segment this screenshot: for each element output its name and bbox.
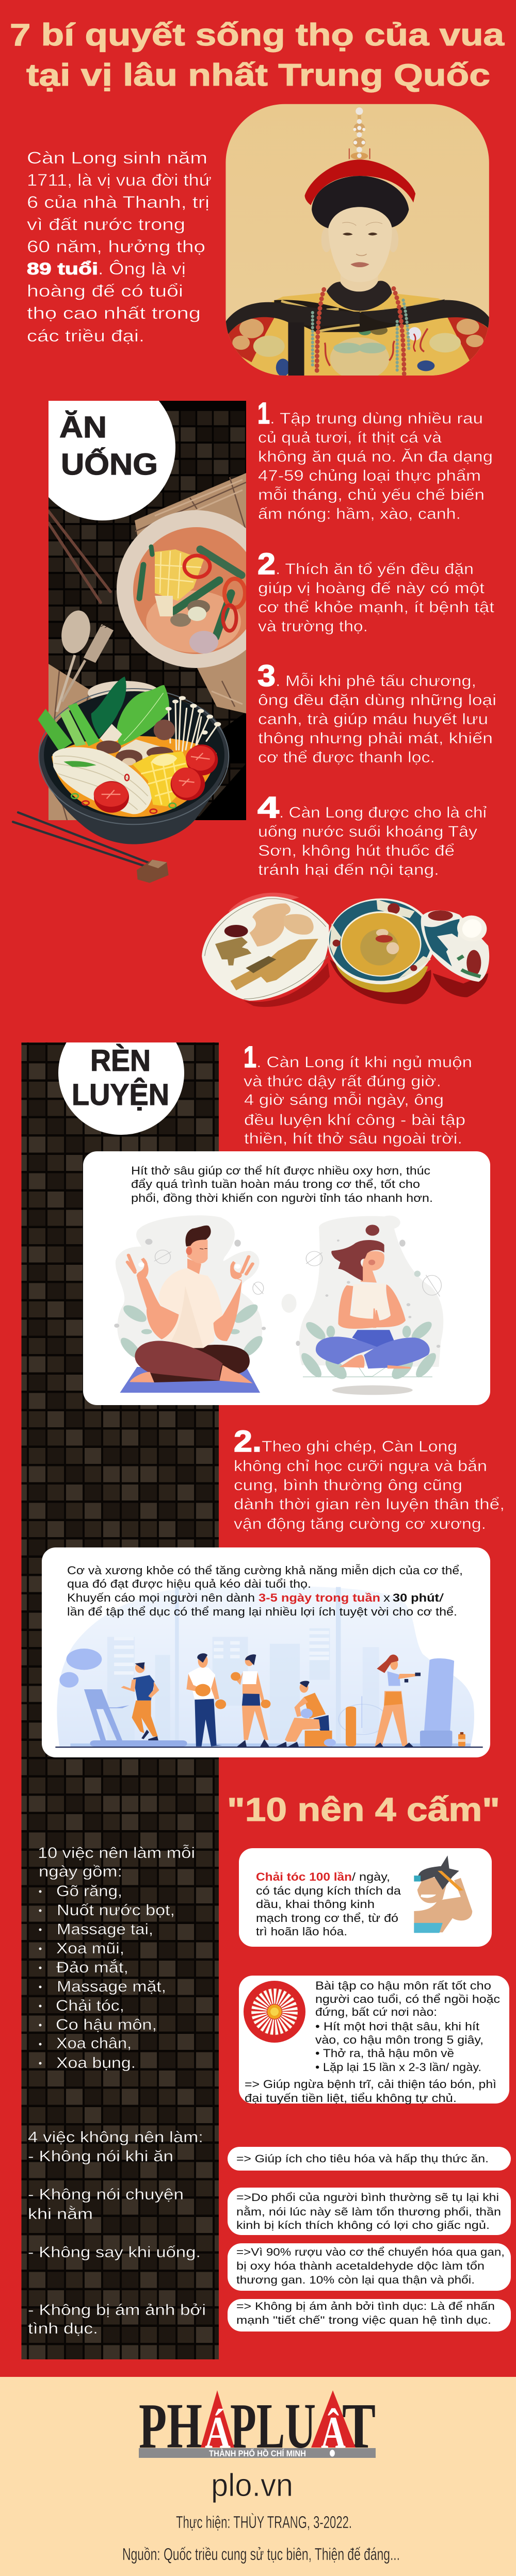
text block: 10 daily habits: Xoa mũi, xyxy=(56,1940,124,1957)
text block: training tip 1: và thức dậy rất đúng giờ. xyxy=(244,1073,441,1090)
robe xyxy=(226,292,489,376)
text block: training tip 1: . Càn Long ít khi ngủ muộn xyxy=(256,1054,472,1071)
text block: hair brushing benefit: trì hoãn lão hóa. xyxy=(256,1925,347,1938)
monstera leaves xyxy=(67,1649,102,1670)
fur collar xyxy=(327,281,392,311)
text block: breathing benefits xyxy=(131,1164,433,1204)
neck xyxy=(341,274,378,292)
title xyxy=(10,18,505,92)
text block: 4 prohibitions: tình dục. xyxy=(28,2320,98,2337)
red sleeves xyxy=(227,313,274,362)
illustration: meditating woman xyxy=(282,1216,443,1395)
text block: hair brushing benefit: dầu, khai thông kinh xyxy=(256,1898,375,1911)
text block: 4 prohibitions: - Không nói chuyện xyxy=(28,2186,184,2203)
bead necklace xyxy=(317,288,404,374)
tip 4: Sơn, không hút thuốc để xyxy=(258,842,455,859)
text block: exercise recommendation: Cơ và xương khỏe có thể tăng cường khả năng miễn dịch của cơ thể, xyxy=(67,1564,463,1577)
text block: 10 daily habits: Đảo mắt, xyxy=(56,1959,128,1976)
text block: breathing benefits: đẩy quá trình tuần hoàn máu trong cơ thể, tốt cho xyxy=(131,1178,420,1191)
tip 1: 1 xyxy=(257,397,270,430)
text block: training tip 1: 4 giờ sáng mỗi ngày, ông xyxy=(244,1091,444,1108)
boxing woman xyxy=(375,1655,421,1747)
tip 3: canh, trà giúp máu huyết lưu xyxy=(258,711,488,728)
illustration: meditating man xyxy=(114,1215,266,1393)
plate xyxy=(202,896,329,1001)
text block: 4 prohibitions: - Không nói khi ăn xyxy=(28,2148,173,2165)
credits: Thực hiện: THÙY TRANG, 3-2022. xyxy=(176,2513,352,2532)
text block: exercise recommendation: 30 phút xyxy=(393,1591,440,1604)
text block: introduction: 60 năm, hưởng thọ xyxy=(27,237,205,256)
text block: 10 daily habits: Gõ răng, xyxy=(56,1883,122,1900)
text block: hair brushing benefit xyxy=(256,1870,401,1938)
callout: no talking while lying down: kinh bị kích thích không có lợi cho giấc ngủ. xyxy=(236,2220,490,2231)
tip 2 xyxy=(257,547,495,635)
soup bowl xyxy=(335,963,428,992)
text block: introduction: vì đất nước trong xyxy=(27,215,185,234)
tip 3: ông đều đặn dùng những loại xyxy=(258,692,496,709)
heading: RÈN LUYỆN: LUYỆN xyxy=(72,1078,169,1112)
hat fur xyxy=(312,176,409,229)
text block: exercise recommendation: Khuyến cáo mọi người nên dành xyxy=(67,1591,255,1604)
logo: Pháp Luật TP.HCM xyxy=(139,2390,376,2462)
text block: introduction: Càn Long sinh năm xyxy=(27,149,207,167)
text block: hair brushing benefit: mạch trong cơ thể, từ đó xyxy=(256,1912,398,1925)
shiitake xyxy=(96,741,121,754)
herbs xyxy=(215,937,251,966)
tip 4: uống nước suối khoáng Tây xyxy=(258,823,477,840)
tip 2: cơ thể khỏe mạnh, ít bệnh tật xyxy=(258,599,495,616)
soup plate xyxy=(117,510,246,668)
text block: eating tips xyxy=(257,397,496,878)
tip 4: . Càn Long được cho là chỉ xyxy=(279,804,487,821)
vegetables xyxy=(200,549,241,575)
text block: introduction: các triều đại. xyxy=(27,327,144,345)
heading: RÈN LUYỆN xyxy=(58,1042,184,1135)
callout: no talking while lying down xyxy=(228,2188,511,2235)
credits: Nguồn: Quốc triều cung sử tục biên, Thiện đế đáng... xyxy=(122,2545,400,2564)
tip 3: 3 xyxy=(257,659,276,693)
text block: 4 prohibitions xyxy=(28,2129,206,2337)
text block: training tip 1 xyxy=(244,1040,472,1147)
text block: 10 daily habits: Co hậu môn, xyxy=(56,2016,157,2033)
goji berries xyxy=(224,925,248,937)
text block: 10 daily habits: Massage mặt, xyxy=(57,1978,166,1995)
callout: no talking while eating xyxy=(228,2147,511,2171)
icon: woman brushing hair xyxy=(414,1855,472,1933)
text block: training tip 2: dành thời gian rèn luyện thân thể, xyxy=(234,1496,505,1513)
tip 1: ấm nóng: hầm, xào, canh. xyxy=(258,506,461,523)
text block: training tip 2 xyxy=(234,1425,505,1532)
face xyxy=(328,207,392,282)
chopsticks brown xyxy=(49,511,110,602)
heading: ĂN UỐNG xyxy=(49,401,175,520)
text block: 10 daily habits xyxy=(38,1845,195,2072)
heading: RÈN LUYỆN: RÈN xyxy=(90,1044,151,1078)
illustration: bird's nest soup and herbs xyxy=(202,893,492,1007)
title: tại vị lâu nhất Trung Quốc xyxy=(26,58,490,92)
card: pelvic exercise xyxy=(239,1976,509,2105)
text block: 4 prohibitions: 4 việc không nên làm: xyxy=(28,2129,203,2146)
tomatoes xyxy=(186,744,218,775)
text block: introduction: hoàng đế có tuổi xyxy=(27,282,183,300)
text block: 10 daily habits: Xoa chân, xyxy=(56,2035,132,2052)
heading: ĂN UỐNG: ĂN xyxy=(59,411,107,444)
credits xyxy=(122,2513,400,2564)
logo: Pháp Luật TP.HCM: Ậ xyxy=(321,2408,346,2458)
tofu xyxy=(100,724,122,743)
callout: sexual moderation xyxy=(228,2299,511,2332)
chopstick rest xyxy=(137,860,169,883)
text block: pelvic exercise steps: • Hít một hơi thật sâu, khi hít xyxy=(315,2020,480,2033)
corn xyxy=(133,752,190,806)
tip 1: củ quả tươi, ít thịt cá và xyxy=(258,429,442,446)
text block: breathing benefits: Hít thở sâu giúp cơ thể hít được nhiều oxy hơn, thúc xyxy=(131,1164,430,1177)
text block: 4 prohibitions: khi nằm xyxy=(28,2206,93,2223)
runner xyxy=(121,1662,159,1740)
tip 2: 2 xyxy=(257,547,276,581)
text block: pelvic exercise steps: vào, co hậu môn trong 5 giây, xyxy=(315,2033,483,2046)
lid xyxy=(421,910,489,982)
text block: introduction: 89 tuổi xyxy=(27,259,98,278)
text block: pelvic exercise steps xyxy=(245,1979,500,2105)
text block: introduction: 6 của nhà Thanh, trị xyxy=(27,193,209,211)
text block: hair brushing benefit: có tác dụng kích thích da xyxy=(256,1884,401,1897)
tip 2: và trường thọ. xyxy=(258,618,368,635)
tip 1: mỗi tháng, chủ yếu chế biến xyxy=(258,486,485,503)
logo: Pháp Luật TP.HCM: PLU xyxy=(230,2391,316,2462)
logo: Pháp Luật TP.HCM: PH xyxy=(139,2391,202,2462)
tip 4: tránh hại đến nội tạng. xyxy=(258,861,439,878)
callout: no drunkenness: bị oxy hóa thành acetaldehyde dộc làm tổn xyxy=(236,2260,485,2272)
heading: ĂN UỐNG: UỐNG xyxy=(61,448,158,481)
dragon embroidery xyxy=(330,337,389,376)
text block: training tip 2: cung, bình thường ông cũng xyxy=(234,1477,462,1494)
fur shoulders xyxy=(225,300,490,336)
text block: introduction xyxy=(27,149,212,345)
footer panel xyxy=(0,2377,516,2576)
tip 2: giúp vị hoàng đế này có một xyxy=(258,580,485,597)
tip 1: không ăn quá no. Ăn đa dạng xyxy=(258,448,493,465)
enoki mushrooms xyxy=(169,700,218,752)
corn xyxy=(155,549,204,601)
tip 3: . Mỗi khi phê tấu chương, xyxy=(276,673,476,690)
text block: 4 prohibitions: - Không say khi uống. xyxy=(28,2244,201,2261)
text block: training tip 2: không chỉ học cưỡi ngựa và bắn xyxy=(234,1458,487,1475)
title: 7 bí quyết sống thọ của vua xyxy=(10,18,505,52)
logo: Pháp Luật TP.HCM: T xyxy=(342,2391,376,2462)
tip 1: . Tập trung dùng nhiều rau xyxy=(270,410,483,427)
man with dumbbells xyxy=(186,1653,226,1747)
website: plo.vn xyxy=(211,2468,293,2503)
callout: sexual moderation: mạnh "tiết chế" trong việc quan hệ tình dục. xyxy=(236,2314,491,2326)
icon: daisy on red circle xyxy=(244,1981,305,2043)
tip 3 xyxy=(257,659,496,766)
tip 2: . Thích ăn tổ yến đều đặn xyxy=(276,561,474,578)
noodles xyxy=(53,747,152,814)
tip 3: cơ thể được thanh lọc. xyxy=(258,749,435,766)
hat finial xyxy=(350,153,368,159)
text block: exercise recommendation: x xyxy=(383,1591,391,1604)
placemat upper right xyxy=(135,473,246,713)
logo: Pháp Luật TP.HCM: THÀNH PHỐ HỒ CHÍ MINH xyxy=(209,2448,306,2458)
text block: pelvic exercise steps: • Thở ra, thả hậu môn về xyxy=(315,2047,454,2060)
leaf vegetables xyxy=(91,677,126,738)
seated man xyxy=(276,1681,336,1747)
text block: 10 daily habits: Chải tóc, xyxy=(56,1997,124,2014)
ears xyxy=(321,227,330,252)
text block: 10 daily habits: 10 việc nên làm mỗi xyxy=(38,1845,195,1862)
hat crown xyxy=(305,159,415,205)
text block: 10 daily habits: Xoa bụng. xyxy=(56,2055,136,2072)
text block: exercise recommendation: lần để tập thể dục có thể mang lại nhiều lợi ích tuyệt vời cho cơ thể. xyxy=(67,1605,457,1618)
heading: 10 nên 4 cấm: "10 nên 4 cấm" xyxy=(227,1791,500,1828)
text block: 10 daily habits: Nuốt nước bọt, xyxy=(57,1902,175,1919)
scallion and chili xyxy=(71,794,176,808)
callout: no talking while lying down: =>Do phổi của người bình thường sẽ tụ lại khi xyxy=(236,2192,499,2204)
treadmill xyxy=(84,1689,187,1747)
callout: no drunkenness: thương gan. 10% còn lại qua thận và phổi. xyxy=(236,2274,475,2286)
floor xyxy=(70,1743,471,1747)
placemat lower left xyxy=(49,664,92,820)
text block: exercise recommendation xyxy=(67,1564,463,1618)
water bottle xyxy=(458,1732,465,1747)
text block: 4 prohibitions: - Không bị ám ảnh bởi xyxy=(28,2302,206,2319)
tip 4 xyxy=(257,791,487,878)
card: physical exercise xyxy=(42,1547,490,1757)
text block: 10 daily habits: Massage tai, xyxy=(57,1921,153,1938)
logo: Pháp Luật TP.HCM: Á xyxy=(205,2408,231,2458)
text block: exercise recommendation: / xyxy=(439,1591,444,1604)
callout: no talking while lying down: nằm, nói lúc này sẽ làm tổn thương phổi, thần xyxy=(236,2206,501,2218)
text block: 10 daily habits: ngày gồm: xyxy=(39,1863,122,1880)
fur panel xyxy=(288,322,304,377)
shadows xyxy=(244,963,330,1007)
text block: pelvic exercise steps: đại tuyến tiền liệt, tiểu không tự chủ. xyxy=(245,2092,457,2105)
text block: introduction: thọ cao nhất trong xyxy=(27,304,201,322)
bird nest pieces xyxy=(250,904,291,947)
tip 1 xyxy=(257,397,493,523)
spoon and fork xyxy=(57,655,75,712)
text block: training tip 2: 2. xyxy=(234,1425,262,1458)
text block: introduction: . Ông là vị xyxy=(98,259,186,278)
chopsticks black xyxy=(13,812,161,871)
callout: no drunkenness xyxy=(228,2243,511,2291)
cucumber sticks xyxy=(38,709,72,752)
text block: breathing benefits: phổi, đồng thời khiến con người tỉnh táo nhanh hơn. xyxy=(131,1192,433,1204)
text block: exercise recommendation: qua đó đạt được hiệu quả kéo dài tuổi thọ. xyxy=(67,1577,311,1590)
callout: sexual moderation: => Không bị ám ảnh bởi tình dục: Là để nhấn xyxy=(236,2301,495,2312)
text block: hair brushing benefit: Chải tóc 100 lần xyxy=(256,1870,352,1883)
text block: exercise recommendation: 3-5 ngày trong tuần xyxy=(259,1591,380,1604)
card: hair brushing xyxy=(239,1848,492,1947)
text block: training tip 2: vận động tăng cường cơ xương. xyxy=(234,1515,486,1532)
text block: training tip 2: Theo ghi chép, Càn Long xyxy=(262,1438,457,1455)
tip 4: 4 xyxy=(257,791,279,824)
text block: pelvic exercise steps: Bài tập co hậu môn rất tốt cho xyxy=(315,1979,491,1992)
panel: eating (ăn uống) xyxy=(11,401,246,883)
illustration: gym people xyxy=(55,1586,483,1748)
text block: pelvic exercise steps: => Giúp ngừa bệnh trĩ, cải thiện táo bón, phì xyxy=(245,2078,496,2091)
text block: training tip 1: 1 xyxy=(244,1040,256,1074)
collar band xyxy=(274,299,445,332)
text block: pelvic exercise steps: • Lặp lại 15 lần x 2-3 lần/ ngày. xyxy=(315,2061,481,2074)
rolled mat and hoop xyxy=(338,1696,386,1747)
callout: no drunkenness: =>Vì 90% rượu vào cơ thể chuyển hóa qua gan, xyxy=(236,2246,505,2258)
punching bag xyxy=(420,1658,454,1747)
tip 1: 47-59 chủng loại thực phẩm xyxy=(258,467,481,484)
text block: training tip 1: thiền, hít thở sâu ngoài trời. xyxy=(244,1130,462,1147)
text block: hair brushing benefit: / ngày, xyxy=(352,1870,390,1883)
panel: training (rèn luyện) xyxy=(22,1011,219,2359)
text block: pelvic exercise steps: người cao tuổi, có thể ngồi hoặc xyxy=(315,1993,500,2006)
text block: introduction: 1711, là vị vua đời thứ xyxy=(27,171,212,189)
text block: pelvic exercise steps: đứng, bất cứ nơi nào: xyxy=(315,2006,437,2018)
tip 3: thông nhưng phải mát, khiến xyxy=(258,730,493,747)
portrait of Emperor Qianlong xyxy=(222,103,495,381)
text block: training tip 1: đều luyện khí công - bài tập xyxy=(244,1112,465,1129)
card: deep breathing xyxy=(83,1151,490,1405)
woman with dumbbells xyxy=(231,1654,270,1747)
callout: no talking while eating: => Giúp ích cho tiêu hóa và hấp thụ thức ăn. xyxy=(236,2153,489,2165)
illustration: hot pot bowl xyxy=(13,677,229,883)
